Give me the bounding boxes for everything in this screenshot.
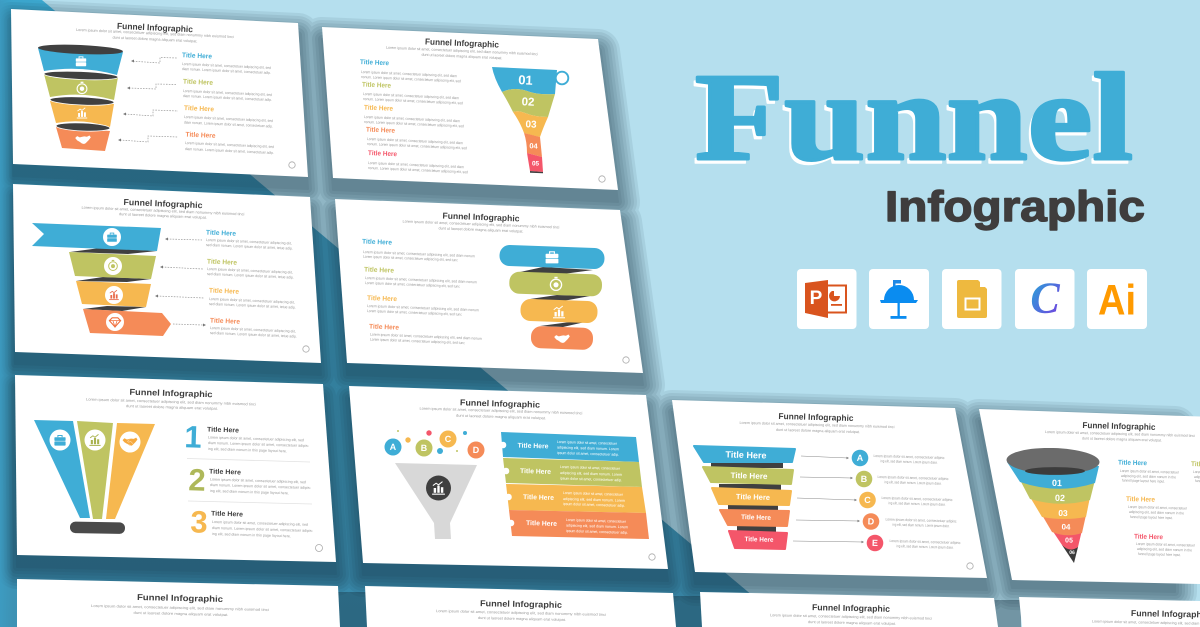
numbered text rows: 1 [184, 419, 202, 455]
text rows: Title Here [207, 259, 237, 267]
text rows: Lorem ipsum dolor sit amet, consectetuer adipiscing elit, sed tunc [367, 309, 462, 317]
text rows: Lorem ipsum dolor sit amet, consectetuer adipiscing elit, sed diam [364, 115, 460, 123]
colored bands: Lorem ipsum dolor sit amet, consectetuer [560, 465, 621, 471]
footer icon [289, 162, 295, 168]
cone funnel chart: 03 [1058, 508, 1068, 518]
subtitle: Lorem ipsum dolor sit amet, consectetuer adipiscing elit, sed diam nonummy nibh euismod tinci [86, 397, 256, 407]
app tile: Keynote [869, 269, 929, 329]
numbered text rows: ing elit, sed diam nonum in this page layout here. [212, 532, 291, 538]
footer icon [967, 563, 973, 569]
numbered text rows: ing elit, sed diam nonum in this page layout here. [208, 447, 287, 453]
text rows [362, 239, 482, 345]
main title: Funnel: Funnel [692, 53, 1130, 191]
heading: Funnel Infographic [425, 36, 499, 50]
text rows: adipiscing elit, sed diam nonum in the [1129, 510, 1184, 515]
subtitle: Lorem ipsum dolor sit amet, consectetuer adipiscing elit, sed diam nonummy nibh euismod tinci [739, 421, 895, 429]
text rows: nonum. Lorem ipsum dolor sit amet, consectetuer adipiscing elit, sed [367, 142, 467, 150]
footer icon [316, 544, 322, 552]
slide 12: cropped bottom slide [1019, 597, 1200, 627]
subtitle: dunt ut laoreet dolore magna aliquam erat volutpat. [438, 226, 524, 234]
slide 10: cropped bottom slide [365, 586, 676, 627]
text rows: Lorem ipsum dolor sit amet, consectetuer adipisc [885, 518, 957, 523]
colored bands: Title Here [526, 520, 557, 528]
text rows: Title Here [366, 127, 395, 135]
funnel chart: 02 [521, 96, 535, 109]
grey funnel [395, 463, 477, 539]
text rows: Lorem ipsum dolor sit amet, consectetuer adipiscing elit, sed [184, 115, 273, 123]
text rows: Lorem ipsum dolor sit amet, consectetuer adipisc [877, 475, 949, 481]
trapezoid funnel chart: Title Here [725, 449, 767, 461]
text rows: Lorem ipsum dolor sit amet, consectetuer [1120, 469, 1180, 475]
subtitle [91, 604, 269, 617]
colored bands: ipsum dolor sit amet, consectetuer adip. [557, 451, 619, 457]
text rows: Lorem ipsum dolor sit amet, consectetuer adipisc [881, 496, 953, 502]
slide 4: stacked pills funnel [335, 199, 643, 373]
subtitle [86, 397, 256, 411]
text rows: Lorem ipsum dolor sit amet, consectetuer adipiscing elit, sed [182, 62, 271, 70]
cone funnel chart [1006, 447, 1100, 563]
numbered text rows: diam nonum. Lorem ipsum dolor sit amet, consectetuer adipis- [210, 483, 312, 490]
colored bands: ipsum dolor sit amet, consectetuer adip. [566, 529, 628, 535]
subtitle: dunt ut laoreet dolore magna aliquam erat volutpat. [112, 36, 198, 43]
subtitle [1045, 430, 1195, 443]
subtitle: dunt ut laoreet dolore magna aliquam erat volutpat. [456, 414, 546, 420]
heading: Funnel Infographic [480, 598, 562, 610]
slide 11: cropped bottom slide [700, 592, 998, 627]
text rows: Title Here [182, 52, 212, 61]
numbered text rows: Lorem ipsum dolor sit amet, consectetuer adipiscing elit, sed [210, 478, 306, 484]
text rows: Lorem ipsum dolor sit amet, consectetuer adipiscing elit, sed diam [363, 92, 459, 100]
colored bands [500, 432, 649, 539]
text rows: Lorem ipsum dolor sit amet, consectetuer adipiscing elit, sed diam [368, 161, 464, 169]
trapezoid funnel chart: Title Here [736, 492, 770, 502]
heading: Funnel Infographic [778, 411, 854, 423]
text rows: Title Here [183, 79, 213, 87]
numbered text rows: Lorem ipsum dolor sit amet, consectetuer adipiscing elit, sed [212, 520, 308, 527]
dashed arrows [118, 58, 178, 142]
subtitle: Lorem ipsum dolor sit amet, consectetuer adipiscing elit, sed diam nonummy nibh euismod tinci [770, 613, 932, 621]
trapezoid funnel chart: Title Here [741, 514, 771, 522]
text rows: Lorem ipsum dolor sit amet, consectetuer adipiscing elit, sed diam nonum [370, 333, 482, 341]
text rows: sed diam nonum. Lorem ipsum dolor sit amet, tetue adip. [209, 302, 296, 310]
colored bands: Lorem ipsum dolor sit amet, consectetuer [563, 491, 624, 497]
lettered circles: B [861, 474, 868, 484]
text rows: Title Here [210, 318, 240, 326]
text rows: Title Here [368, 150, 397, 158]
text rows: Lorem ipsum dolor sit amet, consectetuer adipiscing elit, sed diam [361, 70, 457, 78]
text rows: Title Here [369, 324, 399, 332]
text rows: Title Here [362, 239, 392, 247]
lettered circles: E [872, 538, 878, 548]
text rows: Lorem ipsum dolor sit amet, consectetuer adipiscing elit, [209, 297, 295, 305]
text rows: ing elit, sed diam nonum. Lorem ipsum dolor. [880, 459, 938, 465]
slide 2: cup funnel [322, 27, 618, 190]
heading: Funnel Infographic [129, 387, 213, 399]
subtitle [770, 613, 932, 626]
text rows: nonum. Lorem ipsum dolor sit amet, consectetuer adipiscing elit, sed [364, 120, 464, 128]
app tile: Google Slides [942, 269, 1002, 329]
text rows: Lorem ipsum dolor sit amet, consectetuer adipiscing elit, sed diam nonum [367, 304, 479, 312]
slide 1: elliptical funnel [11, 9, 308, 177]
funnel chart: 01 [518, 72, 533, 88]
text rows: diam nonum. Lorem ipsum dolor sit amet, consectetuer adip. [185, 147, 274, 155]
text rows: ing elit, sed diam nonum. Lorem ipsum dolor. [896, 544, 954, 550]
subtitle: Lorem ipsum dolor sit amet, consectetuer adipiscing elit, sed diam nonummy nibh euismod tinci [91, 604, 269, 612]
lettered circles: A [857, 453, 864, 463]
funnel columns chart [34, 420, 155, 534]
text rows: Lorem ipsum dolor sit amet, consectetuer adipisc [873, 454, 945, 460]
text rows: Title Here [360, 59, 389, 67]
slide 6: grey funnel with bands [349, 386, 668, 569]
text rows: Lorem ipsum dolor sit amet, consectetuer adipiscing elit, [210, 326, 296, 334]
text rows: Lorem ipsum dolor sit amet, consectetuer adipiscing elit, sed tunc [365, 281, 460, 289]
subtitle: dunt ut laoreet dolore magna aliquam erat volutpat. [1082, 436, 1162, 443]
bottom row gap shadows [336, 592, 1021, 627]
colored bands: Title Here [517, 443, 549, 450]
lettered bubbles: C [445, 434, 452, 444]
background: diagonal teal band [0, 0, 790, 627]
colored bands: Title Here [520, 468, 551, 476]
numbered text rows: Title Here [209, 469, 241, 476]
subtitle: Lorem ipsum dolor sit amet, consectetuer adipiscing elit, sed diam nonummy nibh euismod tinci [76, 28, 234, 39]
lettered bubbles: D [473, 445, 480, 455]
subtitle: Infographic: Infographic [885, 183, 1145, 231]
heading: Funnel Infographic [812, 602, 890, 614]
app tile: PowerPoint [797, 269, 856, 329]
colored bands: adipiscing elit, sed diam nonum. Lorem [560, 471, 622, 477]
cone funnel chart: 06 [1069, 550, 1075, 556]
subtitle: Lorem ipsum dolor sit amet, consectetuer adipiscing elit, sed diam nonummy nibh euismod tinci [386, 46, 538, 56]
subtitle: Lorem ipsum dolor sit amet, consectetuer adipiscing elit, sed diam nonummy nibh euismod tinci [81, 206, 245, 216]
colored bands: Lorem ipsum dolor sit amet, consectetuer [557, 440, 618, 446]
text rows [182, 52, 274, 155]
colored bands: ipsum dolor sit amet, consectetuer adip. [560, 477, 622, 482]
slide 5: three column funnel [15, 375, 336, 562]
text rows [873, 454, 961, 550]
pill funnel chart [499, 245, 605, 350]
text rows: nonum. Lorem ipsum dolor sit amet, consectetuer adipiscing elit, sed [361, 75, 461, 83]
colored bands: adipiscing elit, sed diam nonum. Lorem [557, 446, 619, 451]
text rows: funnell page layout here input. [1130, 515, 1173, 520]
main title: Funnel: Funnel [695, 49, 1133, 187]
subtitle [402, 219, 560, 234]
colored bands: adipiscing elit, sed diam nonum. Lorem [566, 524, 628, 529]
text rows: Title Here [1118, 460, 1147, 467]
subtitle: Lorem ipsum dolor sit amet, consectetuer adipiscing elit, sed diam nonummy nibh euismod tinci [436, 609, 606, 617]
text rows: Title Here [209, 288, 239, 296]
heading: Funnel Infographic [1082, 420, 1156, 432]
dashed arrows [155, 238, 206, 326]
text rows: Title Here [364, 267, 394, 275]
colored bands: Lorem ipsum dolor sit amet, consectetuer [566, 518, 627, 524]
text rows: diam nonum. Lorem ipsum dolor sit amet, consectetuer adip. [182, 67, 271, 75]
text rows [360, 59, 468, 174]
numbered text rows: diam nonum. Lorem ipsum dolor sit amet, consectetuer adipis- [208, 441, 310, 448]
app tile: PowerPoint: P [810, 288, 823, 309]
text rows: nonum. Lorem ipsum dolor sit amet, consectetuer adipiscing elit, sed [363, 97, 463, 105]
lettered circles: D [868, 516, 875, 527]
text rows: ing elit, sed diam nonum. Lorem ipsum dolor. [888, 501, 946, 507]
cone funnel chart: 01 [1052, 478, 1062, 488]
text rows: diam nonum. Lorem ipsum dolor sit amet, consectetuer adip. [184, 121, 273, 129]
cone funnel chart: 02 [1055, 493, 1065, 503]
text rows: Lorem ipsum dolor sit amet, consectetuer adipiscing elit, sed diam nonum [363, 250, 475, 258]
funnel chart [38, 43, 123, 151]
subtitle: dunt ut laoreet dolore magna aliquam erat volutpat. [421, 53, 503, 60]
subtitle: dunt ut laoreet dolore magna aliquam erat volutpat. [133, 611, 229, 617]
heading: Funnel Infographic [442, 211, 520, 223]
text rows: Title Here [206, 230, 236, 238]
numbered text rows: Title Here [207, 427, 239, 434]
lettered bubbles: B [421, 443, 428, 453]
text rows: Title Here [1134, 534, 1163, 541]
text rows: Lorem ipsum dolor sit amet, consectetuer adipiscing elit, sed [183, 89, 272, 97]
slide 3: ribbon funnel [13, 184, 321, 363]
cone funnel chart: 04 [1061, 522, 1071, 532]
text rows: funnell page layout here input. [1122, 479, 1165, 484]
slide 8: cone funnel [979, 409, 1200, 584]
subtitle: Lorem ipsum dolor sit amet, consectetuer adipiscing elit, sed diam nonummy nibh euismod tinci [1045, 430, 1195, 438]
heading: Funnel Infographic [123, 197, 203, 210]
text rows: Title Here [364, 105, 393, 113]
trapezoid funnel chart: Title Here [744, 536, 774, 544]
text rows: Lorem ipsum dolor sit amet, consectetuer adipiscing elit, [207, 267, 293, 275]
subtitle: dunt ut laoreet dolore magna aliquam erat volutpat. [478, 616, 566, 622]
lettered bubbles: A [390, 442, 397, 452]
app tile: Canva [1015, 269, 1074, 329]
funnel chart: 04 [529, 141, 539, 151]
text rows: sed diam nonum. Lorem ipsum dolor sit amet, tetue adip. [210, 331, 297, 339]
subtitle [436, 609, 606, 622]
numbered text rows: 2 [188, 462, 206, 498]
text rows: Lorem ipsum dolor sit amet, consectetuer adipiscing elit, sed tunc [363, 255, 458, 262]
text rows: sed diam nonum. Lorem ipsum dolor sit amet, tetue adip. [206, 243, 293, 251]
app tile: Illustrator: Ai [1098, 276, 1136, 324]
lettered bubbles [384, 430, 484, 458]
footer icon [303, 346, 309, 352]
heading: Funnel Infographic [117, 21, 193, 34]
numbered text rows [184, 419, 314, 540]
text rows: ing elit, sed diam nonum. Lorem ipsum dolor. [884, 480, 942, 486]
text rows: sed diam nonum. Lorem ipsum dolor sit amet, tetue adip. [207, 272, 294, 280]
funnel chart: 03 [525, 119, 537, 131]
text rows: Title Here [184, 105, 214, 113]
funnel chart: 05 [532, 160, 540, 168]
left edge glow [0, 0, 13, 627]
text rows: adipiscing elit, sed diam nonum in the [1121, 474, 1176, 479]
app tile: Canva: C [1030, 274, 1060, 322]
slide 7: stacked trapezoid funnel [672, 400, 987, 578]
subtitle: Lorem ipsum dolor sit amet, consectetuer adipiscing elit, sed diam nonummy nibh euismod tinci [402, 219, 560, 230]
subtitle: dunt ut laoreet dolore magna aliquam erat volutpat. [119, 212, 207, 220]
subtitle [739, 421, 895, 434]
connector arrows [793, 456, 864, 543]
numbered text rows: diam nonum. Lorem ipsum dolor sit amet, consectetuer adipis- [212, 526, 314, 533]
subtitle: dunt ut laoreet dolore magna aliquam erat volutpat. [776, 428, 860, 434]
text rows: Lorem ipsum dolor sit amet, consectetuer adipiscing elit, sed tunc [370, 338, 465, 345]
text rows: nonum. Lorem ipsum dolor sit amet, consectetuer adipiscing elit, sed [368, 166, 468, 174]
trapezoid funnel chart: Title Here [730, 471, 768, 481]
text rows: Lorem ipsum dolor sit amet, consectetuer adipiscing elit, [206, 238, 292, 246]
funnel chart [492, 67, 568, 173]
text rows [206, 230, 297, 339]
subtitle [419, 407, 583, 420]
subtitle: Lorem ipsum dolor sit amet, consectetuer adipiscing elit, sed diam nonummy nibh euismod tinci [419, 407, 583, 415]
trapezoid funnel chart [694, 446, 795, 549]
text rows: Lorem ipsum dolor sit amet, consectetuer [1128, 505, 1188, 511]
text rows: Lorem ipsum dolor sit amet, consectetuer adipiscing elit, sed diam [367, 137, 463, 145]
cone funnel chart: 05 [1065, 537, 1073, 545]
footer icon [649, 554, 655, 560]
heading: Funnel Infographic [137, 592, 223, 604]
text rows: Title Here [185, 132, 216, 140]
lettered circles [852, 450, 883, 551]
text rows: Title Here [362, 82, 391, 90]
lettered circles: C [864, 495, 871, 505]
text rows: diam nonum. Lorem ipsum dolor sit amet, consectetuer adip. [183, 94, 272, 102]
app tile: Illustrator [1087, 269, 1147, 329]
numbered text rows: ing elit, sed diam nonum in this page layout here. [210, 489, 289, 495]
numbered text rows: Title Here [211, 511, 243, 518]
text rows: adipiscing elit, sed diam nonum in the [1137, 547, 1192, 552]
text rows: ing elit, sed diam nonum. Lorem ipsum dolor. [892, 523, 950, 528]
ribbon funnel chart [32, 223, 171, 336]
subtitle: dunt ut laoreet dolore magna aliquam erat volutpat. [808, 620, 896, 626]
text rows: Title Here [367, 295, 397, 303]
text rows: Lorem ipsum dolor sit amet, consectetuer adipiscing elit, sed diam nonum [365, 276, 477, 284]
numbered text rows: 3 [190, 504, 208, 540]
subtitle: dunt ut laoreet dolore magna aliquam erat volutpat. [126, 404, 218, 411]
text rows: Lorem ipsum dolor sit amet, consectetuer adipisc [889, 539, 961, 545]
colored bands: ipsum dolor sit amet, consectetuer adip. [563, 502, 625, 508]
text rows: Lorem ipsum dolor sit amet, consectetuer adipiscing elit, sed [185, 141, 274, 149]
text rows [1118, 460, 1200, 557]
footer icon [623, 357, 629, 363]
colored bands: Title Here [523, 494, 554, 502]
colored bands: adipiscing elit, sed diam nonum. Lorem [563, 497, 625, 503]
text rows: funnell page layout here input. [1138, 552, 1181, 557]
numbered text rows: Lorem ipsum dolor sit amet, consectetuer adipiscing elit, sed [208, 436, 304, 442]
footer icon [599, 176, 605, 182]
heading: Funnel Infographic [460, 397, 540, 410]
slide 9: cropped bottom slide [17, 579, 340, 627]
text rows: Title Here [1126, 496, 1155, 504]
